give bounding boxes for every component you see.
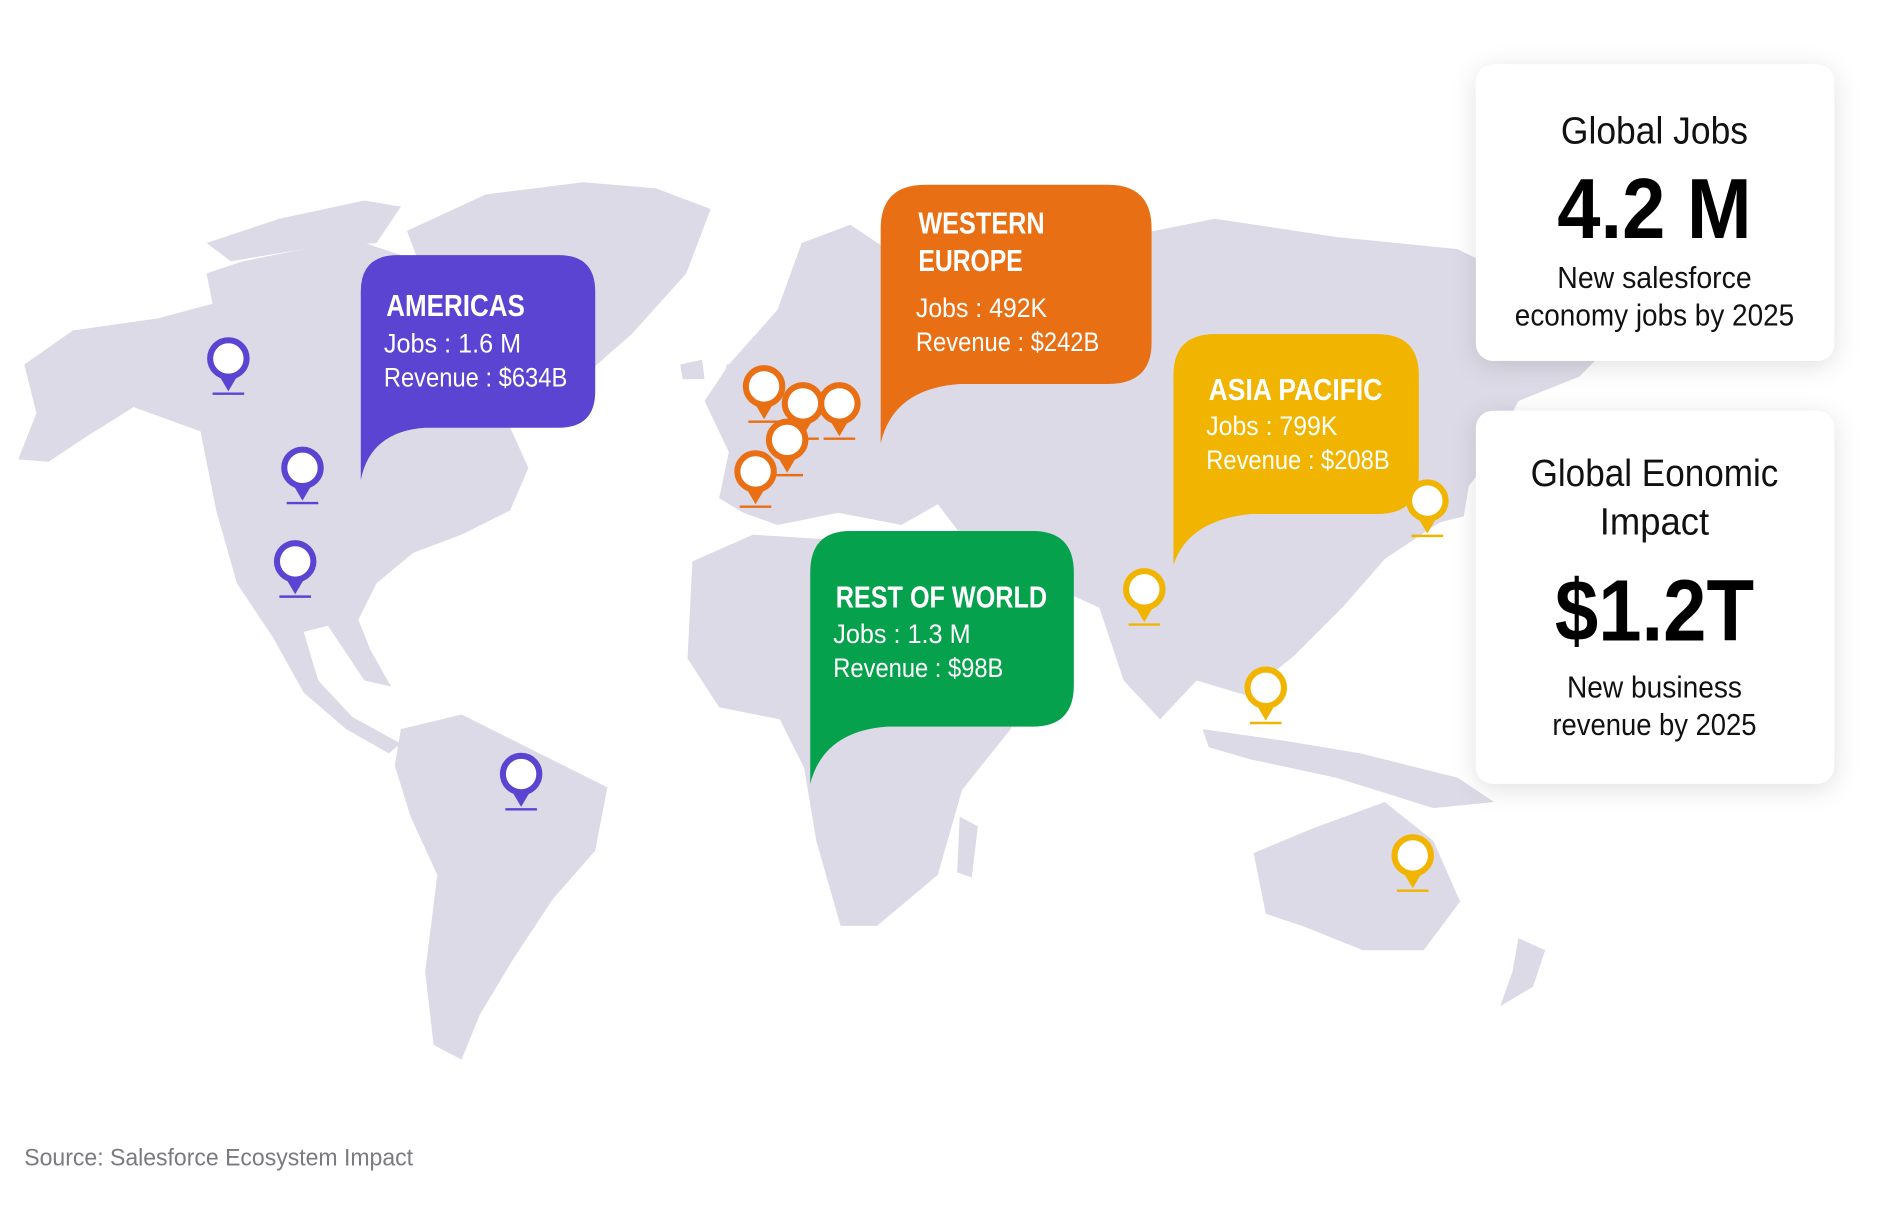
bubble: asia pacific — [1173, 334, 1419, 565]
bubble: western europe — [881, 185, 1152, 444]
card: global jobs: Global Jobs — [1561, 109, 1748, 151]
pins: americas — [210, 340, 539, 809]
bubble: americas: AMERICAS — [386, 290, 525, 323]
bubble: western europe: Jobs : 492K — [916, 293, 1047, 323]
source: Source: Salesforce Ecosystem Impact — [24, 1144, 413, 1171]
bubble: asia pacific: Revenue : $208B — [1206, 445, 1390, 475]
card: global economic impact: Global Eonomic — [1531, 452, 1778, 494]
card: global economic impact — [1476, 411, 1834, 784]
bubble: asia pacific: ASIA PACIFIC — [1209, 374, 1382, 407]
bubble: americas: Jobs : 1.6 M — [384, 328, 521, 358]
card: global jobs: economy jobs by 2025 — [1515, 300, 1794, 333]
card: global jobs — [1476, 64, 1834, 361]
bubble: rest of world: REST OF WORLD — [836, 582, 1047, 615]
card: global economic impact: revenue by 2025 — [1552, 709, 1757, 742]
card: global jobs: New salesforce — [1557, 262, 1752, 295]
card: global jobs: 4.2 M — [1557, 162, 1752, 257]
bubble: western europe: WESTERN — [918, 207, 1045, 240]
bubble: americas: Revenue : $634B — [384, 362, 567, 392]
card: global economic impact: New business — [1567, 671, 1742, 704]
bubble: western europe: EUROPE — [918, 245, 1023, 278]
bubble: rest of world — [810, 531, 1074, 784]
pins: asia pacific — [1126, 482, 1446, 891]
bubble: rest of world: Revenue : $98B — [833, 653, 1003, 683]
bubble: rest of world: Jobs : 1.3 M — [833, 619, 971, 649]
bubble: western europe: Revenue : $242B — [916, 327, 1099, 357]
bubble: americas — [361, 255, 595, 480]
card: global economic impact: Impact — [1600, 501, 1710, 543]
world map — [18, 182, 1603, 1060]
pins: europe — [737, 368, 858, 507]
bubble: asia pacific: Jobs : 799K — [1206, 411, 1338, 441]
card: global economic impact: $1.2T — [1555, 561, 1754, 659]
